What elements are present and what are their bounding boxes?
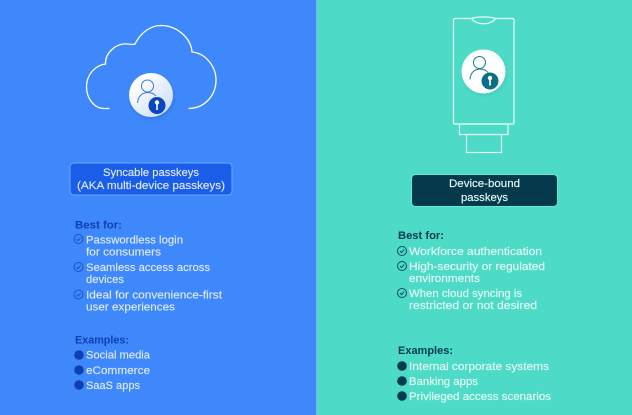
label: device-bound passkeys: passkeys <box>461 192 509 204</box>
list: examples <box>74 350 151 392</box>
list: examples: Internal corporate systems <box>409 361 550 373</box>
list: best for items: devices <box>86 274 125 286</box>
list: examples: Social media <box>86 350 151 362</box>
heading: examples: Examples: <box>398 345 453 357</box>
list: examples: eCommerce <box>86 365 150 377</box>
panel: syncable passkeys <box>0 0 316 415</box>
list: best for items: Passwordless login <box>86 234 183 246</box>
heading: best for: Best for: <box>75 220 122 232</box>
list: best for items: High-security or regulated <box>409 261 545 273</box>
icon: security key device <box>454 17 514 152</box>
label: syncable passkeys: Syncable passkeys <box>103 167 199 179</box>
list: best for items: restricted or not desired <box>409 300 537 312</box>
icon: cloud <box>86 26 216 108</box>
label: syncable passkeys: (AKA multi-device passkeys) <box>77 180 225 192</box>
list: examples: Privileged access scenarios <box>409 391 552 403</box>
icon: user with key <box>460 48 510 98</box>
list: best for items: Seamless access across <box>86 262 211 274</box>
list: best for items: for consumers <box>86 246 162 258</box>
list: best for items: Ideal for convenience-first <box>86 290 222 302</box>
list: best for items: When cloud syncing is <box>409 288 523 300</box>
list: examples <box>397 361 552 403</box>
heading: best for: Best for: <box>398 230 444 242</box>
icon: user with key <box>127 72 177 122</box>
heading: examples: Examples: <box>75 334 129 346</box>
list: examples: SaaS apps <box>86 380 140 392</box>
list: best for items <box>74 234 222 314</box>
list: best for items: Workforce authentication <box>409 246 542 258</box>
list: best for items: user experiences <box>86 302 176 314</box>
label: syncable passkeys <box>70 163 232 195</box>
list: best for items: environments <box>409 273 481 285</box>
label: device-bound passkeys <box>412 174 558 206</box>
list: best for items <box>398 246 545 312</box>
label: device-bound passkeys: Device-bound <box>449 178 520 190</box>
panel: device-bound passkeys <box>316 0 632 415</box>
list: examples: Banking apps <box>409 376 479 388</box>
